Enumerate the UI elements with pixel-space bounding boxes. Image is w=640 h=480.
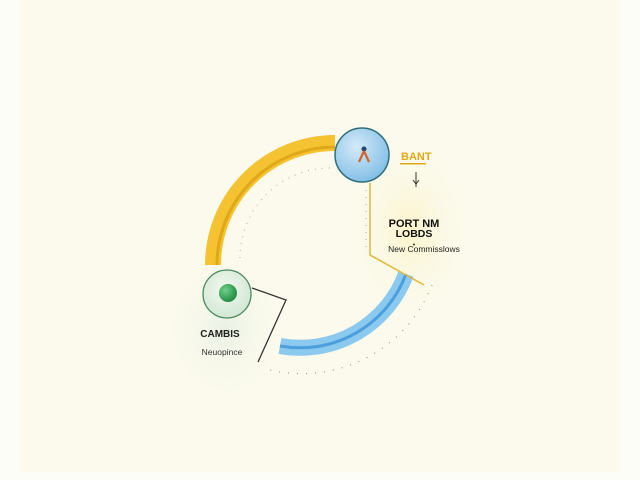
callout text: right: •: [413, 242, 416, 249]
callout text: right: PORT NM: [389, 218, 439, 230]
glow: right callout: [350, 140, 470, 320]
connector: blue node to callout: [370, 183, 424, 285]
dotted outer ticks: [270, 285, 432, 374]
node: green circle: [203, 270, 251, 318]
dotted vertical guide: [365, 190, 367, 252]
callout text: left: [200, 329, 243, 357]
connector: green node: [252, 288, 286, 362]
callout text: right: [388, 218, 460, 254]
callout text: left: Neuopince: [202, 347, 243, 357]
yellow arc: [213, 143, 335, 265]
glow: left callout: [165, 260, 285, 400]
callout text: left: CAMBIS: [200, 329, 240, 340]
dotted inner ring: [240, 168, 330, 258]
icon: small arrow: [413, 172, 419, 187]
icon: person: [359, 146, 369, 162]
blue arc: [280, 274, 406, 348]
label: BANT: BANT: [401, 151, 432, 163]
callout text: right: LOBDS: [396, 228, 432, 240]
node: blue circle: [335, 128, 389, 182]
callout text: right: New Commisslows: [388, 244, 460, 254]
